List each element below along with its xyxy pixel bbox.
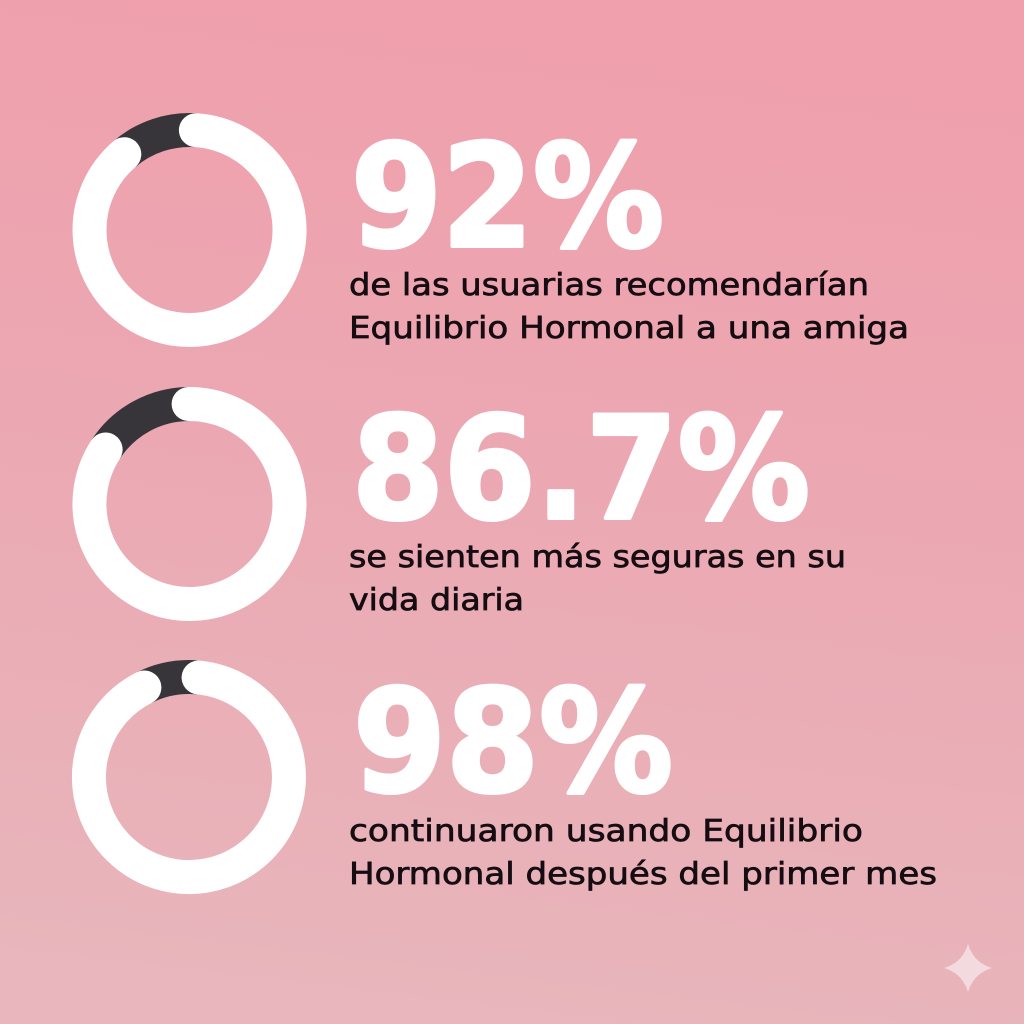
stat row: 92%	[90, 115, 909, 346]
donut chart: 92%	[90, 130, 290, 330]
icon: sparkle	[944, 944, 992, 992]
description: 98%: continuaron usando Equilibrio	[349, 814, 863, 849]
value: 98%: 98%	[353, 660, 673, 825]
description: 86.7%	[349, 540, 846, 618]
value: 92%: 92%	[351, 115, 664, 280]
value: 86.7%: 86.7%	[352, 387, 810, 552]
description: 86.7%: vida diaria	[349, 583, 524, 618]
description: 86.7%: se sienten más seguras en su	[349, 540, 846, 575]
stat row: 86.7%	[89, 387, 846, 618]
description: 92%: de las usuarias recomendarían	[349, 268, 869, 303]
description: 98%: Hormonal después del primer mes	[349, 857, 937, 892]
description: 98%	[349, 814, 937, 892]
donut chart: 98%	[89, 677, 289, 877]
donut chart: 86.7%	[89, 404, 289, 604]
stat row: 98%	[89, 660, 937, 892]
description: 92%: Equilibrio Hormonal a una amiga	[349, 311, 909, 346]
description: 92%	[349, 268, 909, 346]
